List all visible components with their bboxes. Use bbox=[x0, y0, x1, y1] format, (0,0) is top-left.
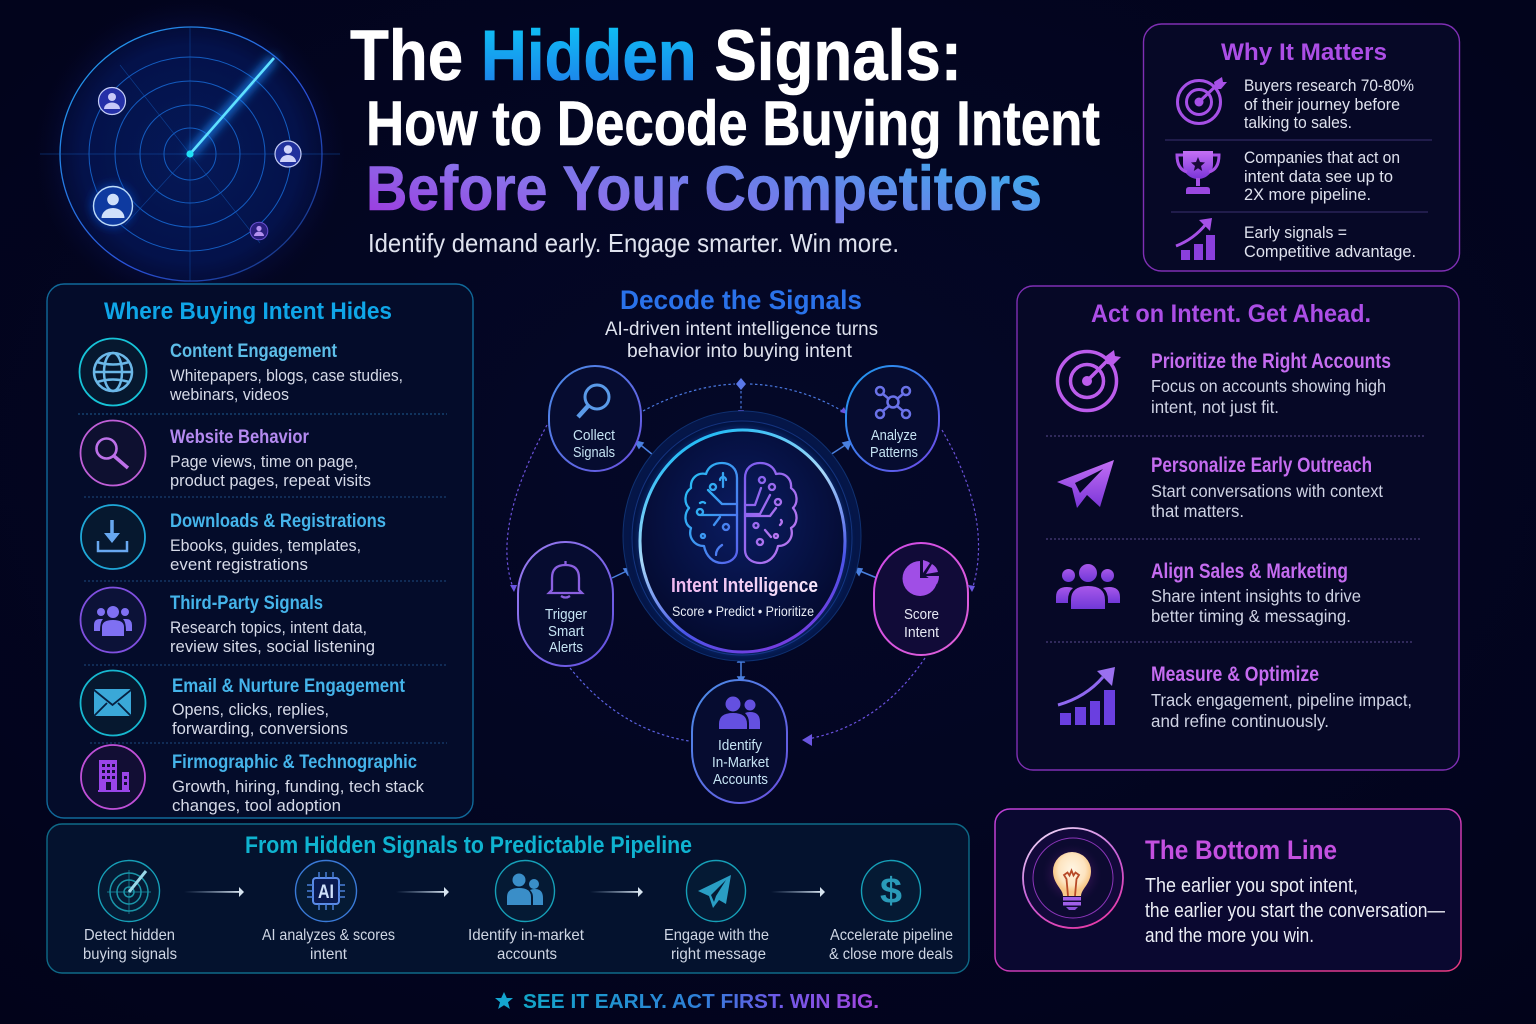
diagram: intent intelligence cycle bbox=[507, 366, 979, 803]
step: accelerate: $ bbox=[880, 870, 902, 911]
text: buyers research: Buyers research 70-80% bbox=[1244, 77, 1414, 95]
icon: team bbox=[1056, 564, 1120, 609]
item: measure: Track engagement, pipeline impact, bbox=[1151, 690, 1412, 710]
radar contact bbox=[92, 185, 134, 227]
step: ai analyzes: AI analyzes & scores bbox=[262, 927, 395, 944]
radar contact bbox=[275, 141, 301, 167]
connecting arcs bbox=[507, 384, 979, 741]
icon: growth chart bbox=[1176, 218, 1215, 260]
node: analyze patterns bbox=[846, 366, 939, 471]
step: engage: right message bbox=[671, 946, 766, 963]
item: content engagement: Whitepapers, blogs, case studies, bbox=[170, 366, 403, 385]
icon: people bbox=[80, 588, 146, 652]
icon: paper plane bbox=[1057, 460, 1114, 508]
step: ai analyzes: intent bbox=[310, 946, 348, 963]
icon: target bbox=[1178, 77, 1227, 124]
step: engage: Engage with the bbox=[664, 927, 769, 944]
step: identify bbox=[468, 860, 585, 963]
item: email and nurture engagement bbox=[172, 676, 406, 738]
icon: pie chart bbox=[903, 560, 939, 596]
item: align: Align Sales & Marketing bbox=[1151, 560, 1348, 583]
icon: magnifier bbox=[578, 385, 609, 417]
step: detect: buying signals bbox=[83, 946, 177, 963]
core label bbox=[671, 575, 818, 619]
icon: envelope bbox=[80, 670, 146, 736]
item: email and nurture engagement: Opens, clicks, replies, bbox=[172, 700, 329, 719]
item: website behavior: Website Behavior bbox=[170, 427, 310, 448]
step: ai analyzes bbox=[262, 860, 395, 963]
subheading bbox=[605, 319, 878, 362]
node: identify in-market accounts: Accounts bbox=[713, 772, 768, 788]
item: downloads and registrations bbox=[170, 511, 386, 574]
icon: globe bbox=[80, 338, 146, 406]
heading: pipeline: From Hidden Signals to Predictable Pipeline bbox=[245, 832, 692, 859]
heading: why it matters: Why It Matters bbox=[1221, 39, 1387, 66]
step: identify: accounts bbox=[497, 946, 557, 963]
core label: Intent Intelligence bbox=[671, 575, 818, 597]
item: firmographic and technographic: changes, tool adoption bbox=[172, 796, 341, 815]
icon: network bbox=[876, 387, 910, 418]
item: third-party signals: Research topics, intent data, bbox=[170, 618, 367, 637]
step: identify: Identify in-market bbox=[468, 927, 585, 944]
step: accelerate: & close more deals bbox=[829, 946, 953, 963]
item: firmographic and technographic bbox=[172, 752, 424, 815]
node: trigger smart alerts: Alerts bbox=[549, 640, 583, 656]
item: third-party signals bbox=[170, 593, 375, 656]
tagline: SEE IT EARLY. ACT FIRST. WIN BIG. bbox=[523, 991, 879, 1013]
radar graphic bbox=[35, 0, 345, 309]
radar contact bbox=[98, 88, 126, 114]
icon: star bbox=[495, 992, 513, 1009]
node: identify in-market accounts bbox=[692, 680, 787, 803]
text: companies: intent data see up to bbox=[1244, 168, 1393, 186]
text: bottom line bbox=[1145, 875, 1445, 947]
node: score intent: Intent bbox=[904, 625, 939, 641]
node: collect signals: Collect bbox=[573, 428, 615, 444]
icon: trophy bbox=[1177, 151, 1219, 194]
heading: bottom line: The Bottom Line bbox=[1145, 835, 1337, 865]
short arrows bbox=[612, 441, 877, 682]
icon: accounts bbox=[719, 696, 760, 729]
item: content engagement: Content Engagement bbox=[170, 341, 338, 362]
item: prioritize: Focus on accounts showing high bbox=[1151, 376, 1386, 396]
item: firmographic and technographic: Firmographic & Technographic bbox=[172, 752, 417, 773]
item: personalize: Personalize Early Outreach bbox=[1151, 454, 1372, 477]
heading: act on intent: Act on Intent. Get Ahead. bbox=[1091, 300, 1371, 328]
item: website behavior bbox=[170, 427, 371, 490]
item: personalize: Start conversations with context bbox=[1151, 481, 1383, 501]
arrow bbox=[771, 887, 825, 897]
text: bottom line: the earlier you start the conversation— bbox=[1145, 900, 1445, 922]
item: prioritize bbox=[1151, 350, 1391, 417]
item: email and nurture engagement: Email & Nurture Engagement bbox=[172, 676, 406, 697]
item: downloads and registrations: Downloads & Registrations bbox=[170, 511, 386, 532]
text: companies: Companies that act on bbox=[1244, 149, 1400, 167]
icon: brain bbox=[685, 463, 797, 563]
node: identify in-market accounts: Identify bbox=[718, 738, 763, 754]
title: The Hidden Signals: bbox=[350, 17, 962, 96]
icon: building bbox=[81, 745, 145, 809]
item: measure: and refine continuously. bbox=[1151, 711, 1329, 731]
item: third-party signals: review sites, social listening bbox=[170, 637, 375, 656]
subheading: behavior into buying intent bbox=[627, 341, 853, 362]
item: firmographic and technographic: Growth, hiring, funding, tech stack bbox=[172, 777, 424, 796]
text: early signals bbox=[1244, 224, 1416, 261]
icon: growth chart bbox=[1058, 667, 1115, 725]
node: identify in-market accounts: In-Market bbox=[712, 755, 769, 771]
text: companies: 2X more pipeline. bbox=[1244, 186, 1371, 204]
node: trigger smart alerts bbox=[518, 542, 613, 666]
text: companies bbox=[1244, 149, 1400, 204]
item: align: better timing & messaging. bbox=[1151, 606, 1351, 626]
arrow bbox=[396, 887, 449, 897]
step: ai analyzes: AI bbox=[318, 882, 334, 903]
icon: magnifier bbox=[80, 420, 146, 486]
item: align: Share intent insights to drive bbox=[1151, 586, 1361, 606]
node: trigger smart alerts: Smart bbox=[548, 624, 584, 640]
icon: lightbulb bbox=[1023, 828, 1123, 928]
item: downloads and registrations: Ebooks, guides, templates, bbox=[170, 536, 361, 555]
heading: decode the signals: Decode the Signals bbox=[620, 285, 862, 315]
text: buyers research: of their journey before bbox=[1244, 96, 1400, 114]
item: measure: Measure & Optimize bbox=[1151, 663, 1319, 686]
step: accelerate: Accelerate pipeline bbox=[830, 927, 953, 944]
item: website behavior: product pages, repeat visits bbox=[170, 471, 371, 490]
arrow bbox=[590, 887, 643, 897]
text: bottom line: The earlier you spot intent, bbox=[1145, 875, 1358, 897]
title: How to Decode Buying Intent bbox=[366, 89, 1100, 159]
item: website behavior: Page views, time on page, bbox=[170, 452, 358, 471]
item: email and nurture engagement: forwarding, conversions bbox=[172, 719, 348, 738]
panel: bottom line bbox=[995, 809, 1461, 971]
step: detect bbox=[83, 860, 177, 963]
item: personalize: that matters. bbox=[1151, 501, 1244, 521]
item: content engagement: webinars, videos bbox=[169, 385, 289, 404]
node: analyze patterns: Patterns bbox=[870, 445, 918, 461]
node: score intent: Score bbox=[904, 607, 939, 623]
text: buyers research: talking to sales. bbox=[1244, 114, 1352, 132]
node: trigger smart alerts: Trigger bbox=[545, 607, 587, 623]
panel: where buying intent hides bbox=[47, 284, 473, 818]
panel: pipeline bbox=[47, 824, 969, 973]
item: align bbox=[1151, 560, 1361, 626]
subheading: AI-driven intent intelligence turns bbox=[605, 319, 878, 340]
arrow bbox=[184, 887, 244, 897]
item: downloads and registrations: event registrations bbox=[170, 555, 308, 574]
core label: Score • Predict • Prioritize bbox=[672, 603, 814, 619]
step: detect: Detect hidden bbox=[84, 927, 175, 944]
icon: bell bbox=[549, 561, 582, 598]
icon: download bbox=[81, 505, 145, 569]
icon: target bbox=[1058, 350, 1121, 410]
radar contact bbox=[250, 222, 268, 240]
text: bottom line: and the more you win. bbox=[1145, 925, 1314, 947]
item: third-party signals: Third-Party Signals bbox=[170, 593, 323, 614]
core circle bbox=[623, 411, 861, 661]
item: prioritize: intent, not just fit. bbox=[1151, 397, 1279, 417]
item: prioritize: Prioritize the Right Accounts bbox=[1151, 350, 1391, 373]
title: Before Your Competitors bbox=[366, 154, 1042, 224]
heading: where buying intent hides: Where Buying Intent Hides bbox=[104, 298, 392, 325]
panel: why it matters bbox=[1144, 24, 1460, 271]
text: early signals: Early signals = bbox=[1244, 224, 1347, 242]
text: buyers research bbox=[1244, 77, 1414, 132]
node: analyze patterns: Analyze bbox=[871, 428, 917, 444]
node: score intent bbox=[874, 543, 968, 655]
panel: act on intent bbox=[1017, 286, 1459, 770]
step: engage bbox=[664, 860, 769, 963]
node: collect signals: Signals bbox=[573, 445, 615, 461]
item: personalize bbox=[1151, 454, 1383, 521]
text: early signals: Competitive advantage. bbox=[1244, 243, 1416, 261]
step: accelerate bbox=[829, 860, 953, 963]
node: collect signals bbox=[549, 366, 641, 471]
item: measure bbox=[1151, 663, 1412, 731]
subtitle: Identify demand early. Engage smarter. Win more. bbox=[368, 228, 899, 258]
title bbox=[350, 17, 1100, 224]
item: content engagement bbox=[169, 341, 403, 404]
